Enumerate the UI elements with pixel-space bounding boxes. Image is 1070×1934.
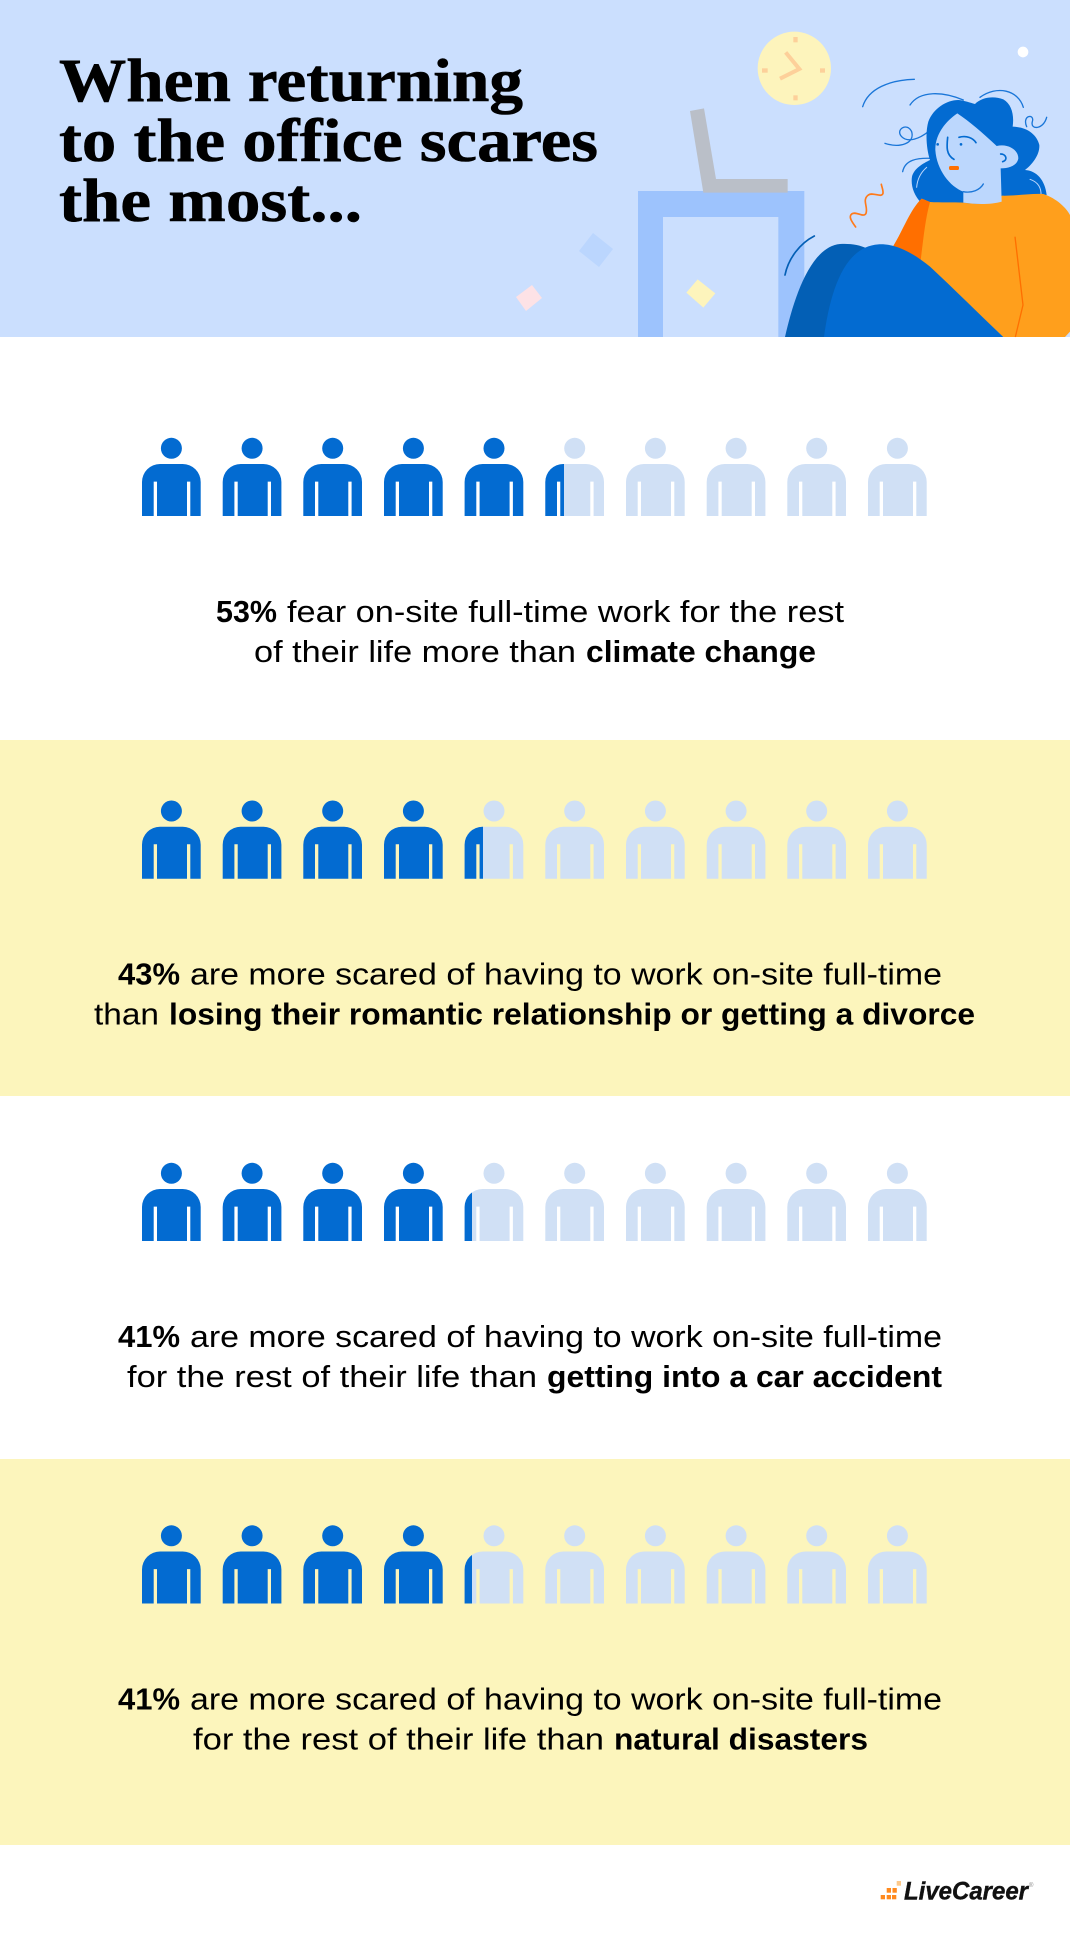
stat text: 53%: of their life more than bbox=[254, 634, 576, 669]
illustration: office scene bbox=[638, 32, 1070, 337]
logo: LiveCareer: ® bbox=[1029, 1882, 1034, 1889]
stat text: 41% disasters: natural disasters bbox=[614, 1722, 868, 1756]
stat text: 43%: are more scared of having to work on-site full-time bbox=[190, 956, 942, 992]
panel: 41% car accident bbox=[118, 1163, 942, 1394]
panel: 41% natural disasters bbox=[0, 1459, 1070, 1845]
face bbox=[935, 113, 1018, 204]
title: to the office scares bbox=[59, 108, 598, 175]
stat text: 53%: climate change bbox=[586, 634, 816, 669]
near leg bbox=[824, 244, 1003, 337]
stat text: 43%: 43% bbox=[118, 956, 180, 992]
stat text: 53%: 53% bbox=[216, 594, 277, 629]
stat text: 41% car: 41% bbox=[118, 1319, 180, 1354]
panel: header bbox=[0, 0, 1070, 337]
face shape bbox=[935, 113, 1018, 204]
stat text: 41% car: for the rest of their life than bbox=[127, 1359, 537, 1394]
icon: desk bbox=[638, 191, 804, 337]
icon: white dot bbox=[1018, 47, 1028, 57]
stat text: 53%: fear on-site full-time work for the rest bbox=[287, 594, 844, 629]
pictogram row: 41% car bbox=[142, 1163, 927, 1241]
stat text: 43%: losing their romantic relationship or getting a divorce bbox=[169, 996, 975, 1032]
sweater bbox=[893, 194, 1070, 337]
stat text: 43%: than bbox=[94, 996, 159, 1032]
title: the most... bbox=[59, 168, 362, 235]
panel: 53% climate change bbox=[142, 438, 927, 669]
pictogram row: 43% bbox=[142, 800, 927, 879]
sweater shadow bbox=[893, 199, 930, 260]
stat text: 41% disasters: 41% bbox=[118, 1682, 180, 1716]
stat text: 41% car: are more scared of having to work on-site full-time bbox=[190, 1319, 942, 1354]
icon: yellow diamond bbox=[686, 279, 715, 308]
facial features bbox=[947, 137, 1006, 192]
hair bbox=[912, 97, 1047, 207]
pictogram row: 53% bbox=[142, 438, 927, 516]
stat text: 41% car bbox=[118, 1319, 942, 1394]
stat text: 41% disasters: are more scared of having to work on-site full-time bbox=[190, 1682, 942, 1716]
stat text: 41% disasters bbox=[118, 1682, 942, 1756]
icon: blue confetti diamond bbox=[579, 233, 613, 267]
stat text: 53% bbox=[216, 594, 844, 669]
head and hair bbox=[885, 91, 1047, 207]
motion arc bbox=[785, 236, 814, 275]
dark far leg bbox=[785, 244, 887, 337]
icon: loose arc bbox=[863, 79, 914, 107]
hair highlights bbox=[917, 167, 1041, 196]
pictogram row: 41% disasters bbox=[142, 1525, 927, 1604]
icon: pink confetti diamond bbox=[516, 285, 542, 311]
icon: laptop bbox=[690, 108, 788, 193]
title bbox=[59, 48, 598, 235]
panel: 43% romantic relationship bbox=[0, 740, 1070, 1096]
stat text: 41% car: getting into a car accident bbox=[547, 1359, 942, 1394]
sweater seam bbox=[1015, 237, 1023, 337]
icon: wall clock bbox=[758, 32, 831, 105]
mouth bbox=[949, 166, 959, 170]
logo: LiveCareer: LiveCareer bbox=[904, 1877, 1029, 1905]
orange squiggle bbox=[850, 184, 883, 227]
icon: woman character bbox=[785, 91, 1070, 337]
hair strands bbox=[885, 91, 1047, 172]
stat text: 43% bbox=[94, 956, 975, 1032]
title: When returning bbox=[59, 48, 523, 115]
stat text: 41% disasters: for the rest of their life than bbox=[193, 1722, 604, 1756]
